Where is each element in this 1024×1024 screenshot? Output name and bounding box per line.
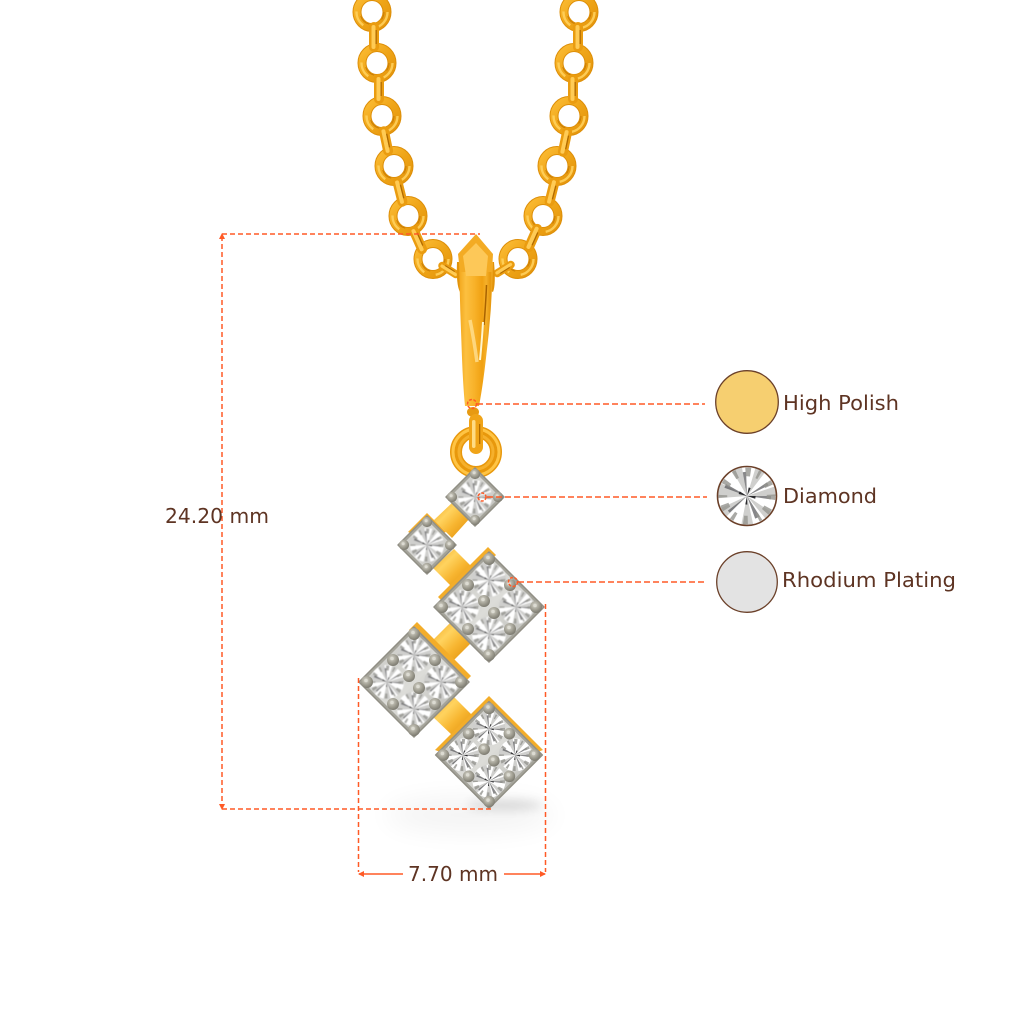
legend: high polish: High Polish <box>783 391 899 415</box>
gold backing edges <box>408 513 543 770</box>
chain: right strand <box>492 0 594 279</box>
ground shadow under pendant <box>385 797 555 833</box>
chain: left strand <box>356 0 461 280</box>
leader line: rhodium plating <box>508 578 706 586</box>
four stone square setting lower <box>436 702 542 808</box>
legend: rhodium plating: Rhodium Plating <box>782 568 956 592</box>
four stone square setting upper <box>434 552 544 662</box>
height dimension <box>165 233 494 810</box>
legend: diamond <box>717 466 877 526</box>
small diamond setting second <box>398 516 456 574</box>
legend: diamond: Diamond <box>783 484 877 508</box>
width dimension: 7.70 mm <box>408 862 498 886</box>
bail loop and jump ring <box>453 414 499 475</box>
width dimension <box>358 604 546 886</box>
height dimension: 24.20 mm <box>165 504 269 528</box>
gold connector bars <box>431 501 472 736</box>
leader line: diamond <box>478 493 707 501</box>
legend: rhodium plating <box>717 552 956 612</box>
four stone square setting left <box>359 627 469 737</box>
legend: high polish <box>716 371 899 433</box>
leader line: high polish <box>468 400 705 408</box>
small diamond setting top <box>446 468 504 526</box>
pendant bail <box>457 234 495 417</box>
